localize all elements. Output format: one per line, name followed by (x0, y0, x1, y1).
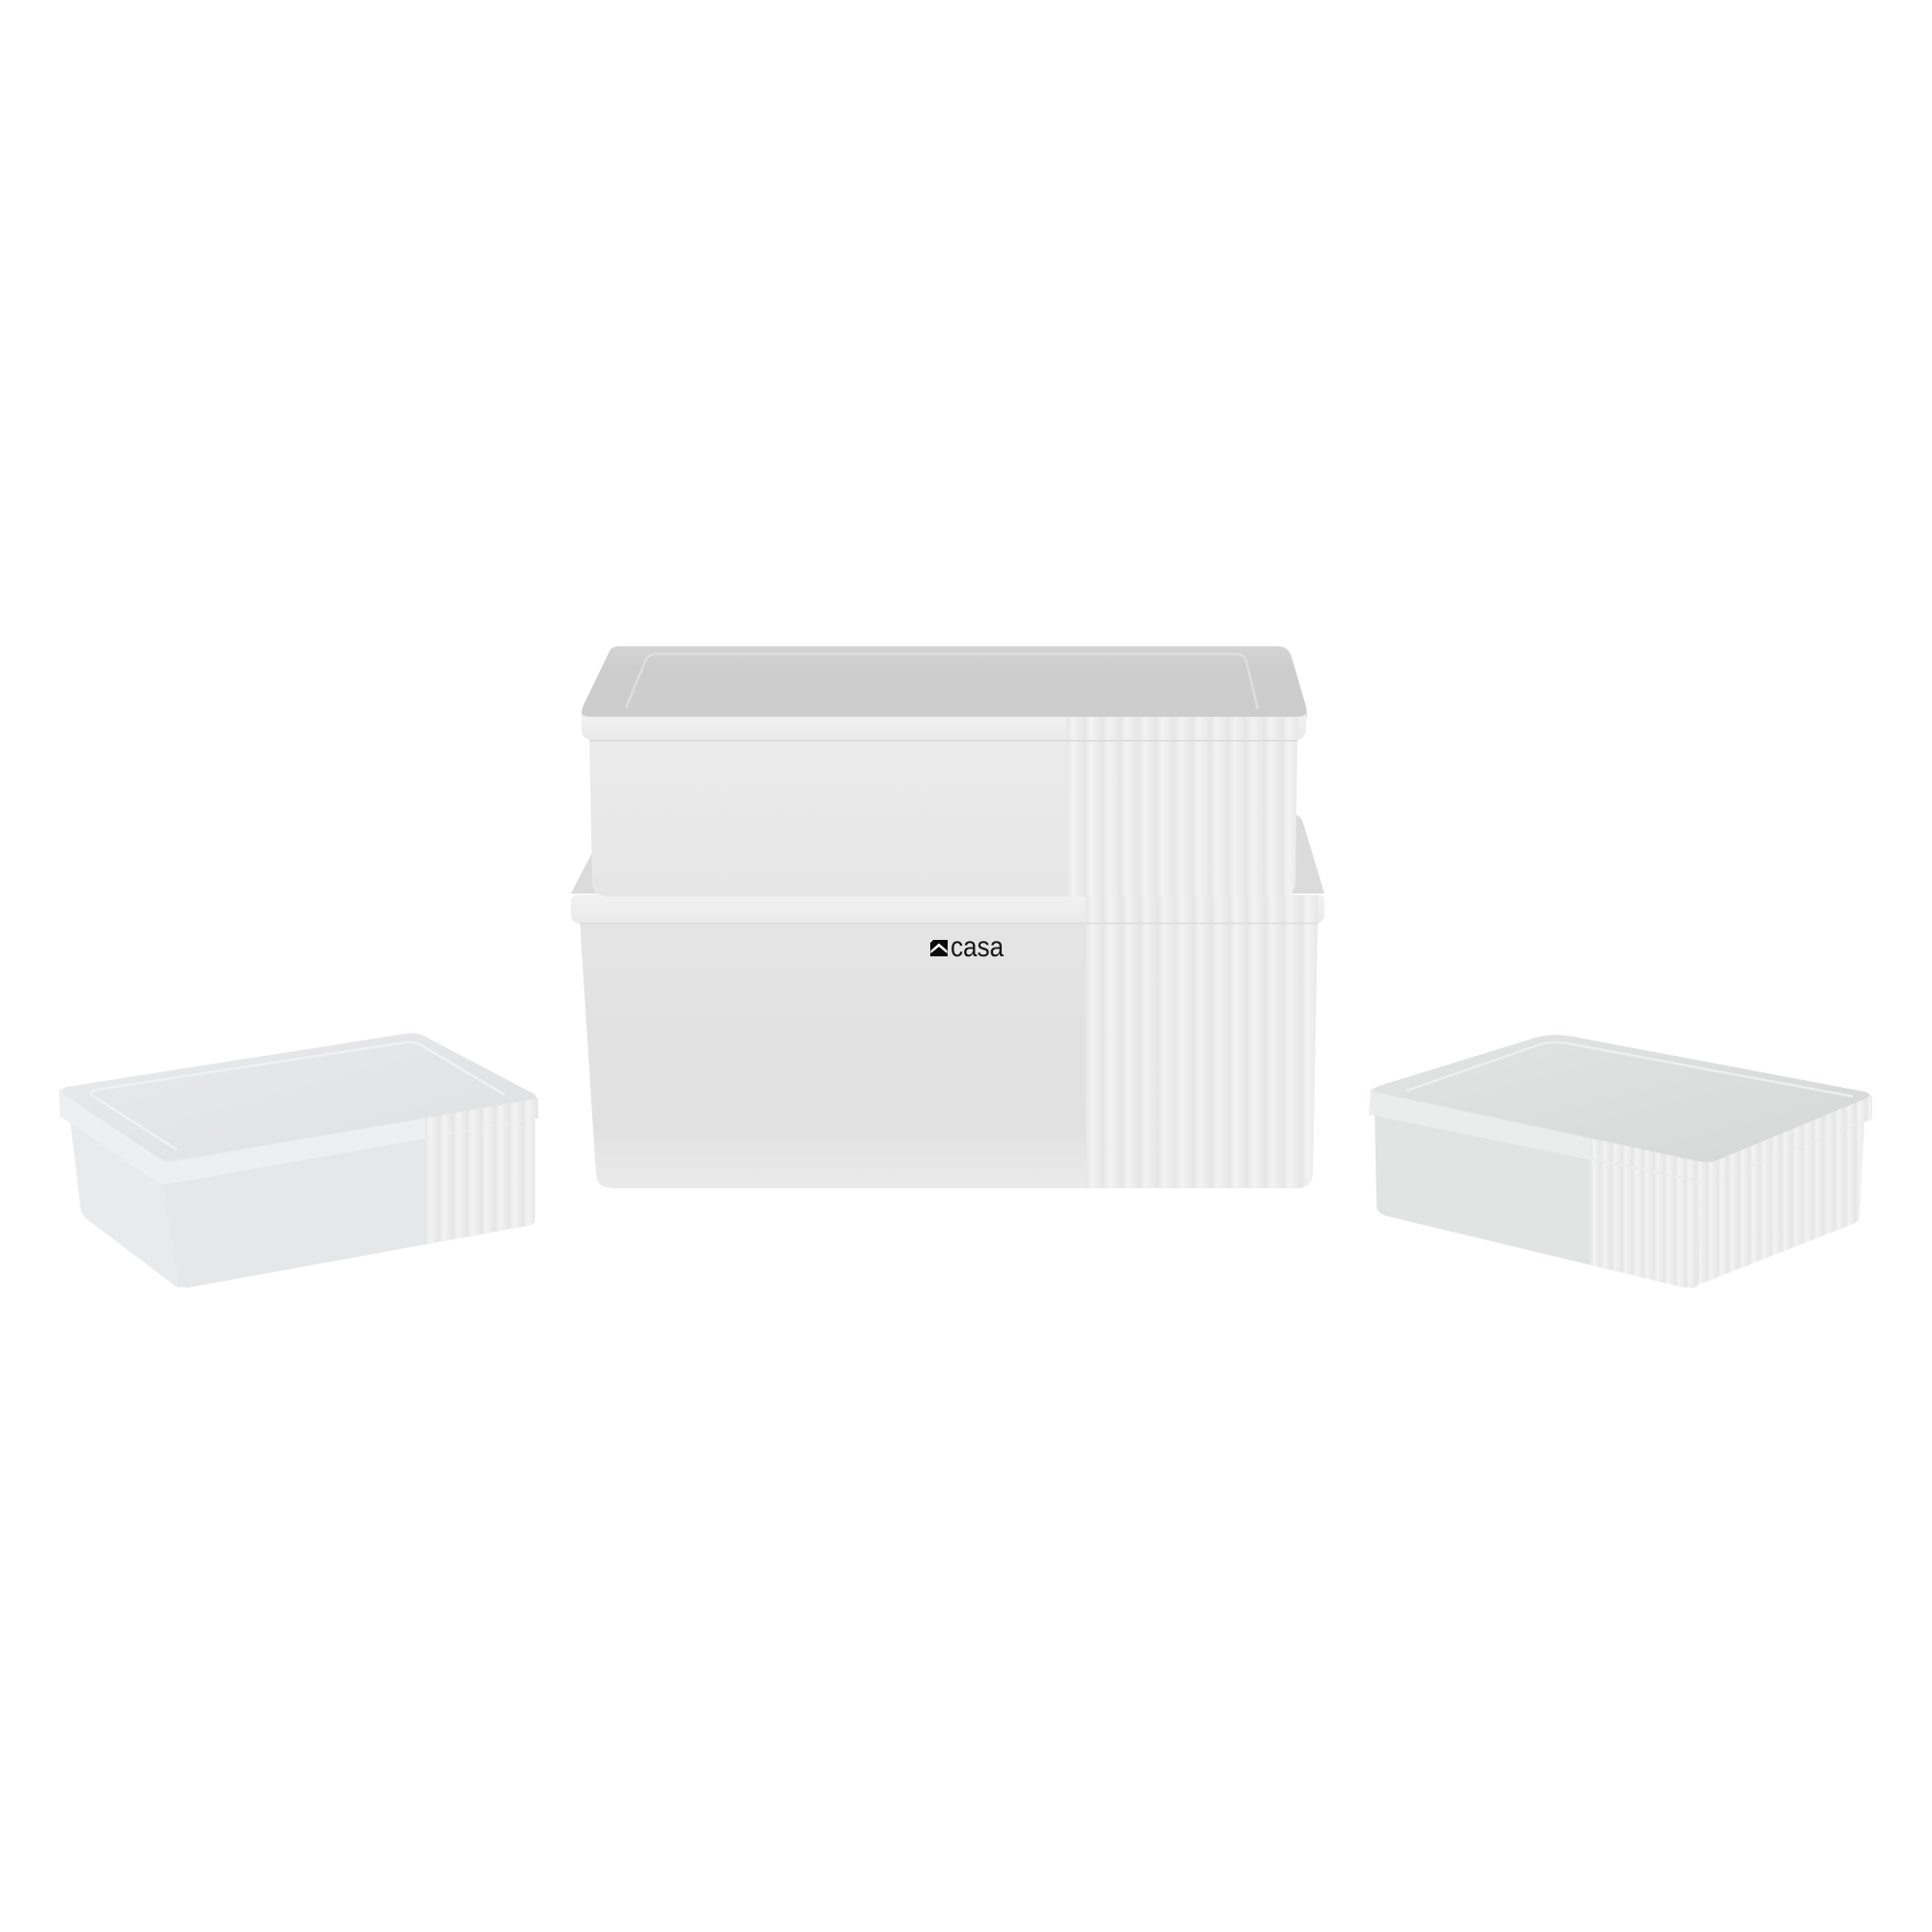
right box body (1375, 1111, 1864, 1288)
right box lid top (1373, 1035, 1870, 1162)
right box right face ribs (1698, 1119, 1864, 1285)
logo wordmark: casa (951, 931, 1004, 963)
left box lid top (62, 1034, 536, 1162)
left small box (60, 1034, 538, 1288)
left box body (70, 1111, 535, 1288)
upper box lid inset line (626, 654, 1258, 709)
right box lid band ribs (1590, 1096, 1871, 1182)
bottom box body ribs (1086, 918, 1319, 1188)
bottom box lid ribs (1086, 895, 1318, 923)
bottom box lid band (571, 895, 1324, 923)
upper box body (589, 734, 1297, 896)
left box ribs (425, 1119, 535, 1244)
upper box lid shadow line (589, 740, 1297, 742)
left box lid ribs (425, 1098, 538, 1138)
right box front face ribs (1590, 1155, 1701, 1288)
upper box body ribs (1066, 734, 1298, 896)
large bottom box (571, 814, 1324, 1188)
bottom box body (580, 918, 1318, 1188)
left box lid inset line (91, 1042, 504, 1150)
upper box lid ribs (1066, 717, 1298, 740)
left box lid band (60, 1090, 538, 1183)
upper stacked box (582, 646, 1307, 896)
product illustration: set of four white storage boxes (59, 646, 1872, 1288)
left box left face (70, 1116, 180, 1288)
logo: casa (930, 931, 1004, 963)
upper box lid top (582, 646, 1307, 720)
logo icon: house chevron (930, 940, 948, 956)
right box lid inset line (1406, 1042, 1853, 1096)
right small box (1370, 1035, 1871, 1288)
right box lid band (1370, 1090, 1871, 1181)
upper box lid band (582, 713, 1306, 740)
bottom box lid top sliver (571, 814, 1324, 894)
